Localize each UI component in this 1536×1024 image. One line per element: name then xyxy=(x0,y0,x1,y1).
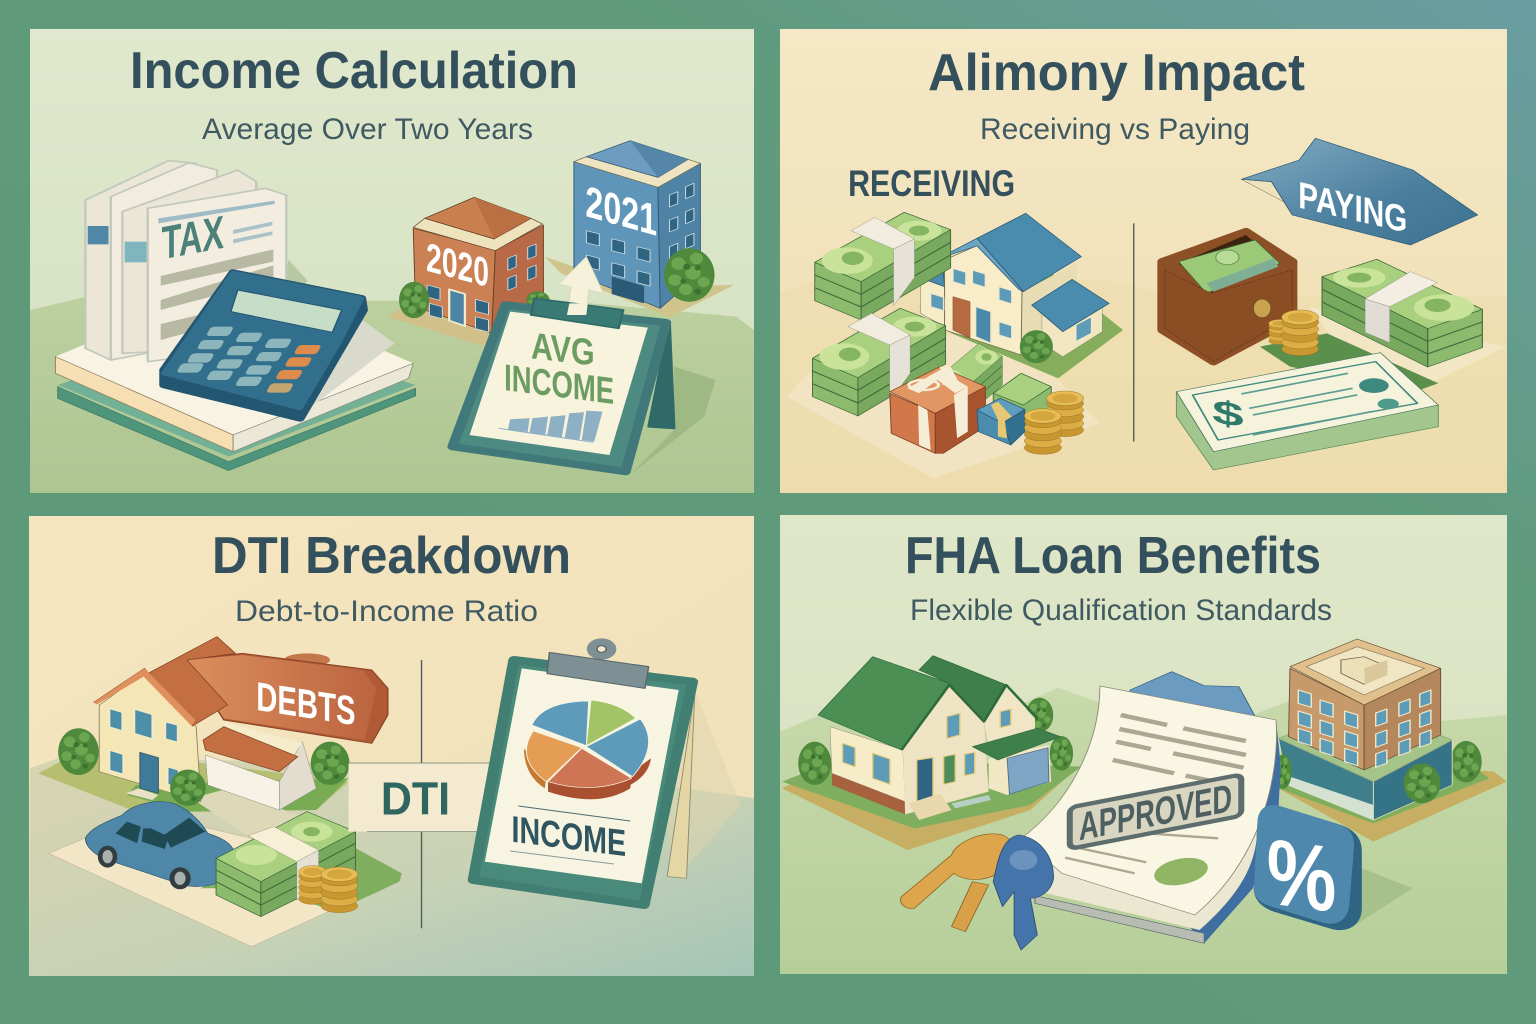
icon: money stacks receiving xyxy=(812,212,1051,428)
icon: car plot xyxy=(48,813,402,947)
label: percent: % xyxy=(1267,820,1336,933)
icon: approved document xyxy=(1021,686,1277,930)
icon: blue folder behind document xyxy=(1035,672,1281,943)
icon: coins paying xyxy=(1269,310,1319,356)
icon: paying banner xyxy=(1241,138,1478,245)
icon: platform and green strip xyxy=(1260,307,1507,392)
icon: coins receiving xyxy=(1024,391,1084,454)
icon: wallet xyxy=(1162,232,1292,362)
icon: gift box xyxy=(890,367,985,453)
stamp: approved xyxy=(1070,774,1241,851)
icon: house plot xyxy=(38,748,349,812)
icon: money stack paying xyxy=(1322,259,1482,367)
icon: 2020 building xyxy=(388,197,550,346)
icon: income clipboard xyxy=(473,638,741,905)
label: 2021: 2021 xyxy=(585,176,657,246)
icon: money stack xyxy=(216,812,355,917)
label: income: INCOME xyxy=(512,808,626,864)
label: 2020: 2020 xyxy=(426,234,489,296)
icon: debts banner xyxy=(185,653,388,743)
subheading: average over two years: Average Over Two Years xyxy=(202,113,533,146)
icon: coins xyxy=(299,866,358,913)
icon: office building xyxy=(1274,639,1507,842)
label: receiving: RECEIVING xyxy=(848,164,1015,204)
label: tax: TAX xyxy=(162,206,224,270)
icon: clip xyxy=(547,638,649,688)
icon: tax documents xyxy=(85,161,286,362)
heading: fha loan benefits: FHA Loan Benefits xyxy=(905,527,1321,585)
icon: car xyxy=(85,802,234,889)
panel: dti breakdown xyxy=(29,516,754,976)
illustration: fha scene xyxy=(780,639,1507,974)
panel: fha loan benefits xyxy=(780,515,1507,974)
label: debts: DEBTS xyxy=(256,674,355,734)
chart: pie chart xyxy=(524,700,651,799)
icon: house xyxy=(58,637,235,806)
stamp: approved: APPROVED xyxy=(1079,776,1232,849)
label: paying: PAYING xyxy=(1298,173,1407,241)
icon: house with plot xyxy=(782,656,1081,850)
panel: income calculation xyxy=(30,29,754,493)
label: dollar sign: $ xyxy=(1212,392,1244,435)
chart: rising bars xyxy=(499,411,603,442)
icon: small gift xyxy=(977,398,1025,445)
icon: garage xyxy=(203,722,349,810)
heading: income calculation: Income Calculation xyxy=(130,42,578,100)
icon: stacked books xyxy=(55,283,416,471)
label: dti: DTI xyxy=(381,772,450,824)
illustration: alimony scene xyxy=(780,138,1507,493)
label: income: INCOME xyxy=(504,356,614,412)
icon: calculator xyxy=(164,273,363,418)
icon: percent badge xyxy=(1254,805,1362,933)
panel: alimony impact xyxy=(780,29,1507,493)
icon: average income clipboard xyxy=(452,298,674,472)
icon: check stack xyxy=(1176,353,1438,470)
heading: dti breakdown: DTI Breakdown xyxy=(212,527,571,585)
subheading: receiving vs paying: Receiving vs Paying xyxy=(980,113,1250,146)
subheading: flexible qualification standards: Flexible Qualification Standards xyxy=(910,594,1332,627)
icon: 2021 building xyxy=(545,141,734,317)
icon: dti label xyxy=(349,660,489,928)
icon: receiving ground and house xyxy=(787,213,1123,478)
label: avg: AVG xyxy=(531,325,595,374)
icon: up arrow xyxy=(559,257,603,315)
heading: alimony impact: Alimony Impact xyxy=(928,44,1305,102)
illustration: income scene xyxy=(30,141,754,493)
illustration: dti scene xyxy=(29,637,754,976)
icon: keys xyxy=(901,834,1054,950)
subheading: debt-to-income ratio: Debt-to-Income Ratio xyxy=(235,595,538,628)
